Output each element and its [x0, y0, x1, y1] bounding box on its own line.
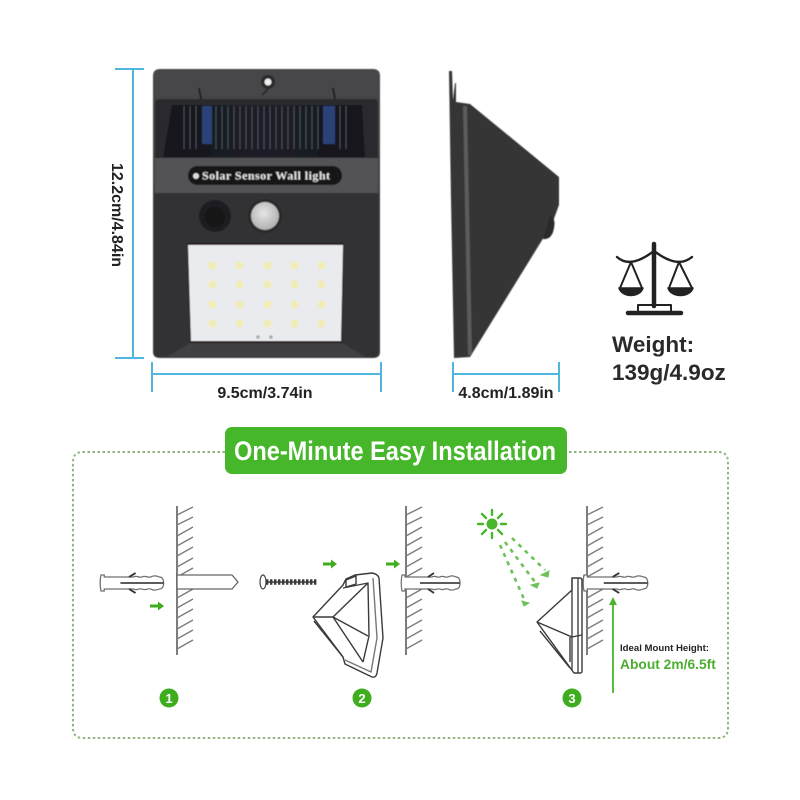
- bottom bezel: [166, 343, 366, 357]
- height dimension: 12.2cm/4.84in: [108, 163, 125, 267]
- label pill: Solar Sensor Wall light: [202, 168, 330, 182]
- step number: [562, 688, 582, 708]
- dashed installation panel: [73, 452, 728, 738]
- wall anchor: [583, 573, 648, 593]
- step number: 3: [568, 691, 576, 706]
- mount height arrow: [609, 597, 617, 693]
- wall anchor: [100, 573, 164, 593]
- LED panel: [187, 243, 344, 343]
- front view of solar wall light: [153, 69, 380, 358]
- sensor button: [199, 200, 231, 232]
- step number: 2: [358, 691, 366, 706]
- back mounting plate: [153, 69, 380, 358]
- step number: [352, 688, 372, 708]
- light outline: [313, 573, 383, 677]
- arrow to anchor: [386, 560, 400, 568]
- side view of light: [449, 71, 559, 358]
- installation title badge: [225, 427, 567, 474]
- label pill: [188, 166, 342, 185]
- depth dimension: [453, 362, 559, 402]
- weight text: Weight:: [612, 332, 694, 357]
- screw: [260, 575, 318, 589]
- weight text: [612, 332, 726, 385]
- step number: [160, 688, 178, 708]
- wall: [177, 506, 193, 655]
- step 2: [313, 506, 460, 708]
- mounting pins: [199, 88, 335, 99]
- sun rays: [500, 538, 549, 606]
- mount height label: Ideal Mount Height:: [620, 643, 709, 654]
- mount height label: About 2m/6.5ft: [620, 657, 716, 672]
- solar housing: [155, 99, 378, 158]
- PIR sensor: [248, 199, 282, 233]
- step 1: [100, 506, 238, 708]
- drilled hole: [177, 575, 238, 589]
- installation title badge: One-Minute Easy Installation: [234, 436, 556, 466]
- wall: [406, 506, 422, 655]
- depth dimension: 4.8cm/1.89in: [458, 385, 554, 402]
- wall: [587, 506, 603, 655]
- width dimension: [152, 362, 381, 402]
- height dimension: [108, 69, 144, 358]
- light side outline: [537, 578, 582, 673]
- lower body: [154, 193, 379, 357]
- mount height label: [620, 643, 716, 672]
- wall anchor: [401, 573, 460, 593]
- label band: [155, 158, 378, 193]
- icon: weight scale: [617, 244, 693, 313]
- solar panel: [163, 105, 365, 157]
- width dimension: 9.5cm/3.74in: [217, 385, 313, 402]
- arrow to wall: [323, 560, 337, 568]
- step number: 1: [165, 691, 173, 706]
- arrow: [150, 602, 164, 610]
- step 3: [478, 506, 716, 708]
- weight text: 139g/4.9oz: [612, 360, 726, 385]
- icon: sun: [478, 510, 506, 538]
- mounting hole: [261, 75, 275, 95]
